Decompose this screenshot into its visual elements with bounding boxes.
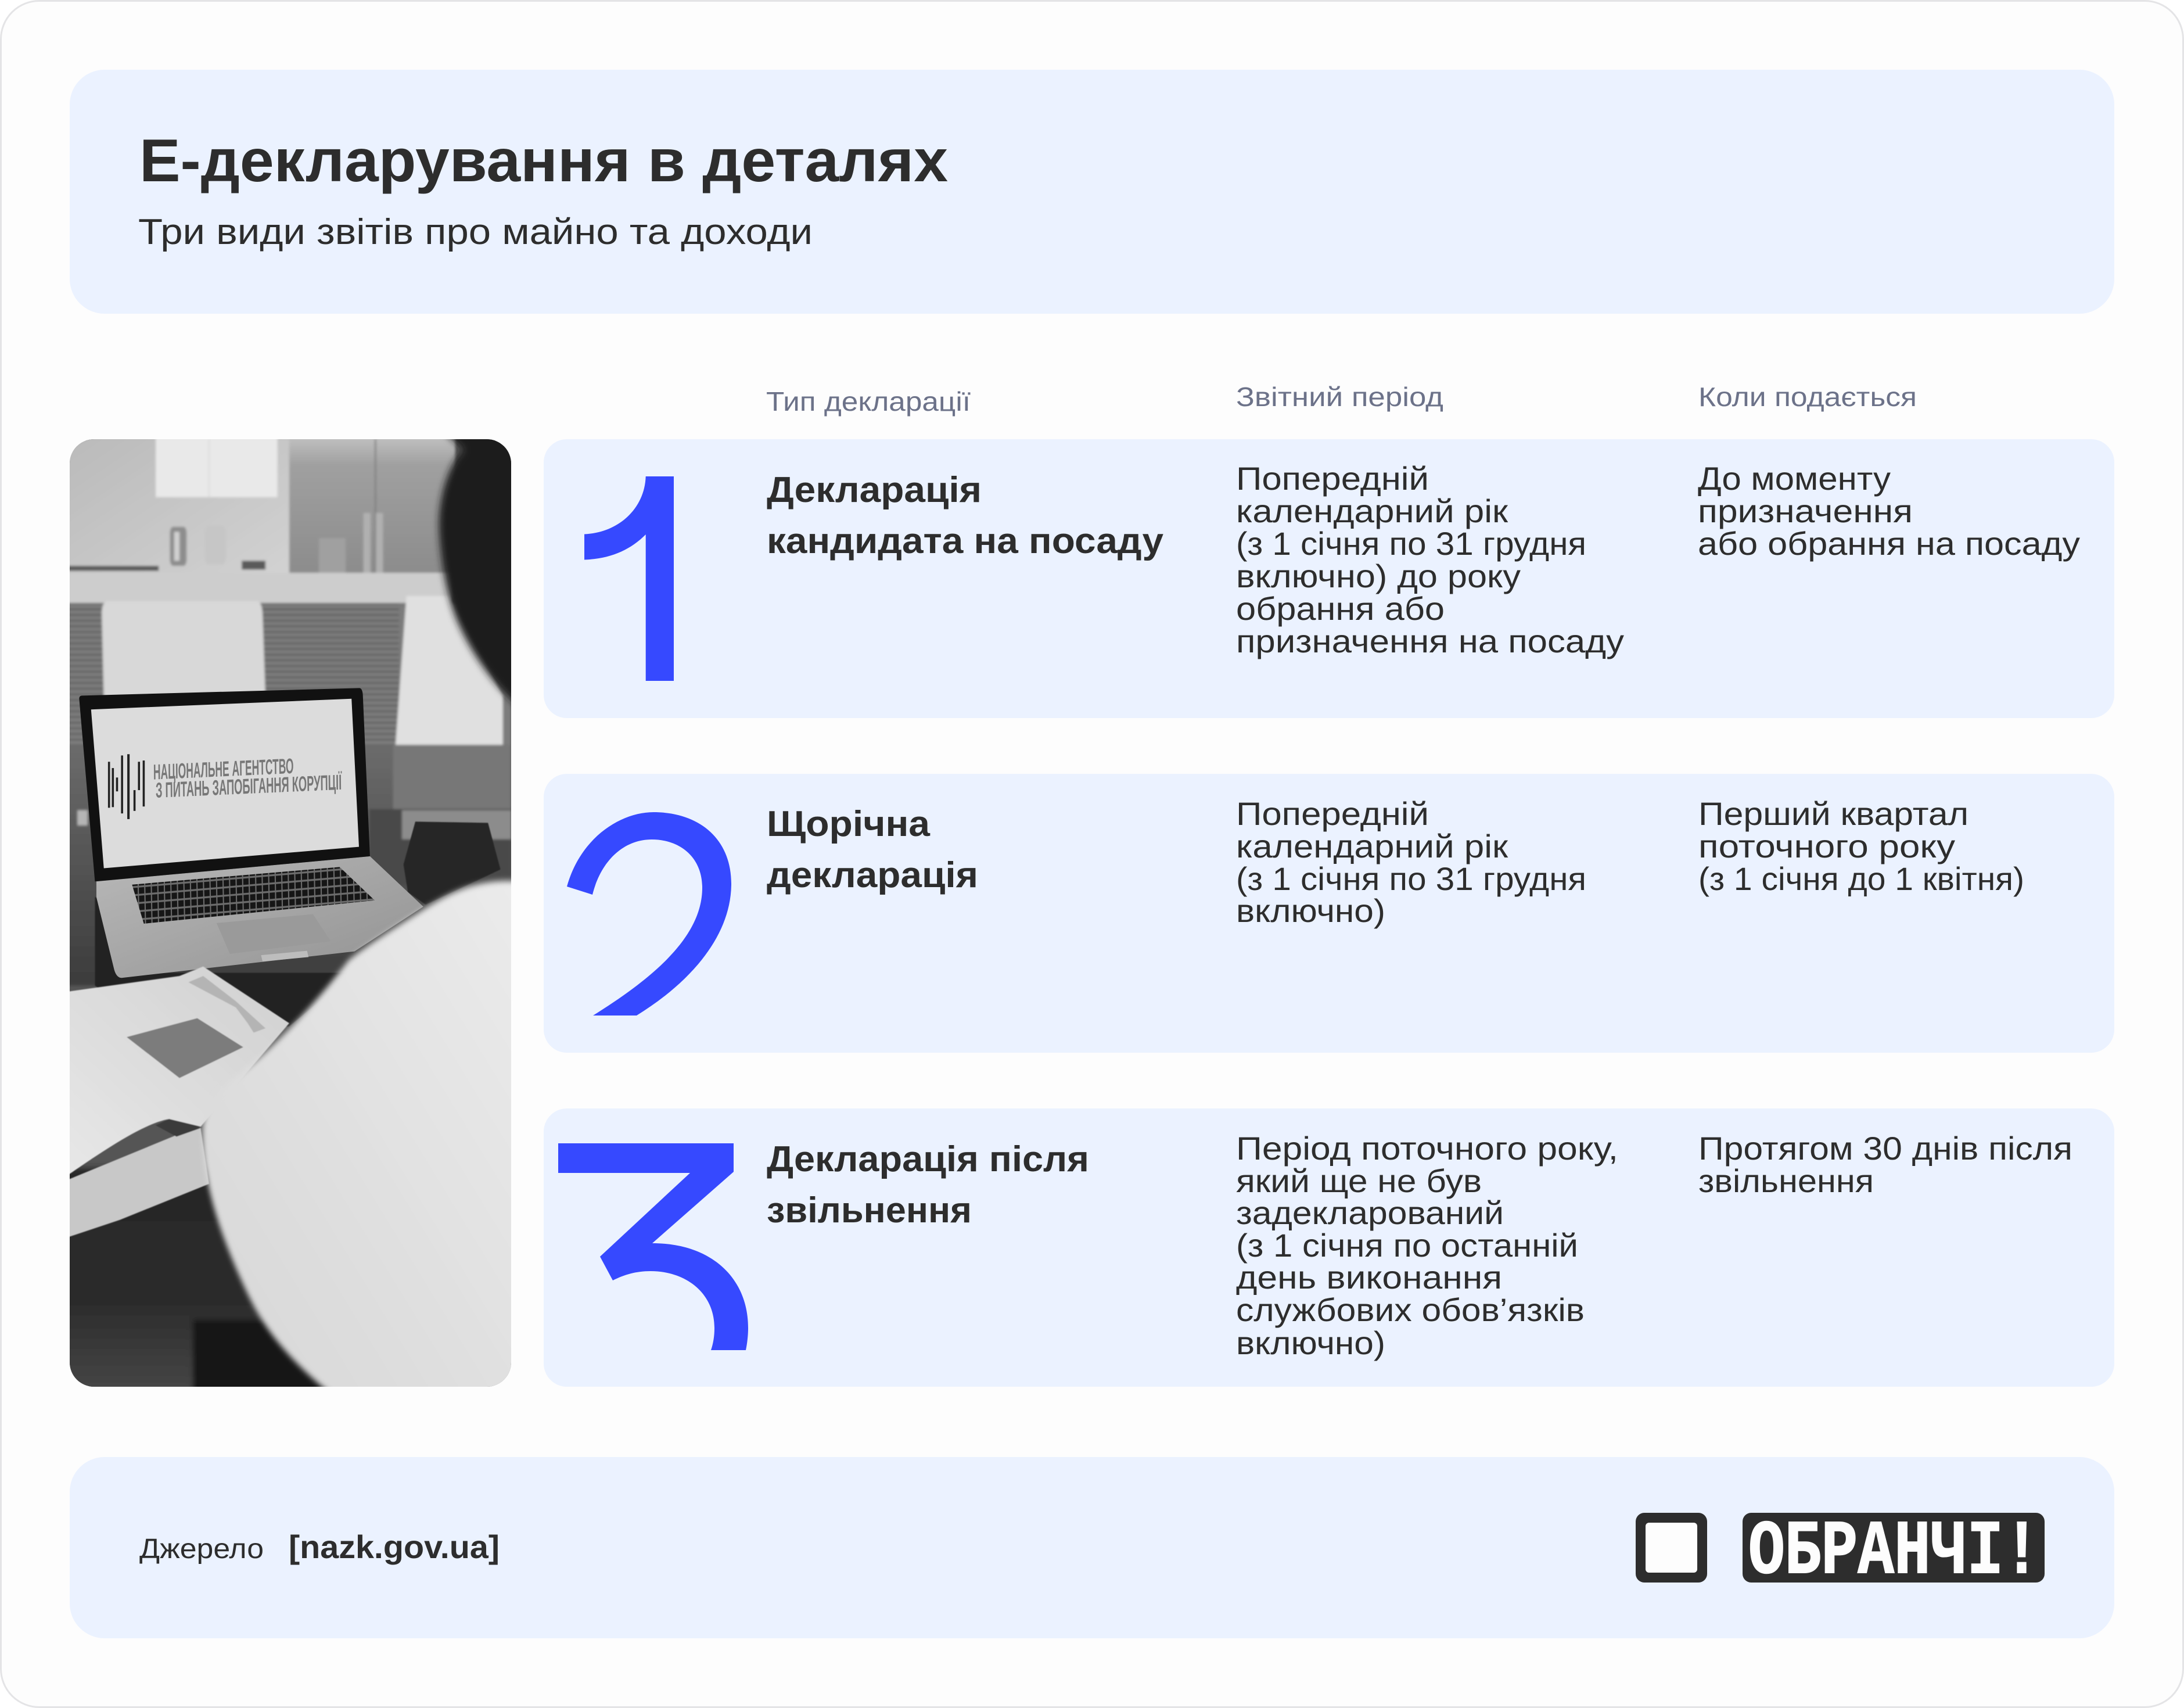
- panel: footer: [70, 1457, 2114, 1638]
- reporting period: день виконання: [1236, 1259, 1502, 1296]
- type: Щорічна: [767, 804, 931, 844]
- source: Джерело: [139, 1534, 264, 1565]
- column headings: Тип декларації: [766, 386, 971, 417]
- table foreground: [70, 1165, 326, 1387]
- number 3: [558, 1143, 748, 1350]
- when filed: поточного року: [1698, 828, 1955, 864]
- laptop: [79, 688, 423, 978]
- type: [767, 470, 1164, 561]
- when filed: звільнення: [1698, 1162, 1874, 1199]
- when filed: призначення: [1698, 493, 1913, 529]
- dark table under laptop: [95, 897, 354, 1027]
- type: кандидата на посаду: [767, 521, 1164, 561]
- person head: [439, 431, 520, 708]
- when filed: Протягом 30 днів після: [1698, 1130, 2072, 1167]
- reporting period: (з 1 січня по 31 грудня: [1236, 525, 1586, 562]
- reporting period: календарний рік: [1236, 828, 1508, 864]
- reporting period: включно): [1236, 1325, 1385, 1361]
- when filed: Перший квартал: [1698, 795, 1969, 832]
- type: декларація: [767, 855, 978, 895]
- reporting period: (з 1 січня по останній: [1236, 1227, 1578, 1264]
- type: [767, 804, 978, 895]
- column headings: Коли подається: [1698, 382, 1917, 412]
- source: [nazk.gov.ua]: [289, 1528, 500, 1565]
- panel: header: [70, 70, 2114, 314]
- bag: [404, 821, 501, 905]
- source: [139, 1528, 500, 1565]
- subtitle: Три види звітів про майно та доходи: [138, 212, 813, 252]
- reporting period: [1236, 795, 1586, 929]
- when filed: [1698, 795, 2024, 897]
- panel: declaration 1: [544, 439, 2114, 718]
- logo: square mark: [1636, 1513, 1707, 1583]
- when filed: [1698, 1130, 2072, 1199]
- panel: declaration 2: [544, 774, 2114, 1053]
- reporting period: Попередній: [1236, 460, 1429, 497]
- when filed: [1698, 460, 2080, 562]
- number 2: [567, 812, 731, 1016]
- reporting period: задекларований: [1236, 1194, 1504, 1231]
- when filed: До моменту: [1698, 460, 1891, 497]
- type: Декларація: [767, 470, 982, 510]
- logo text on screen: НАЦІОНАЛЬНЕ АГЕНТСТВО: [153, 755, 294, 785]
- logo: wordmark: ОБРАНЧІ!: [1748, 1509, 2040, 1596]
- logo text on screen: З ПИТАНЬ ЗАПОБІГАННЯ КОРУПЦІЇ: [156, 770, 342, 803]
- logo text on screen: [153, 759, 342, 798]
- logo bars on screen: [108, 754, 145, 819]
- title: Е-декларування в деталях: [139, 127, 948, 195]
- person shirt: [203, 881, 520, 1401]
- panel: declaration 3: [544, 1108, 2114, 1387]
- type: [767, 1139, 1089, 1230]
- reporting period: календарний рік: [1236, 493, 1508, 529]
- reporting period: Попередній: [1236, 795, 1429, 832]
- type: звільнення: [767, 1190, 972, 1230]
- column headings: [766, 382, 1917, 417]
- reporting period: який ще не був: [1236, 1162, 1482, 1199]
- photo: person at laptop with NACP logo on screen: [58, 418, 520, 1401]
- reporting period: обрання або: [1236, 590, 1445, 627]
- when filed: (з 1 січня до 1 квітня): [1698, 860, 2024, 897]
- reporting period: (з 1 січня по 31 грудня: [1236, 860, 1586, 897]
- when filed: або обрання на посаду: [1698, 525, 2080, 562]
- reporting period: включно) до року: [1236, 558, 1521, 594]
- reporting period: [1236, 1130, 1618, 1361]
- reporting period: Період поточного року,: [1236, 1130, 1618, 1167]
- reporting period: [1236, 460, 1624, 659]
- type: Декларація після: [767, 1139, 1089, 1179]
- number 1: [584, 476, 674, 681]
- reporting period: службових обов’язків: [1236, 1291, 1585, 1328]
- open notebook: [58, 967, 289, 1240]
- column headings: Звітний період: [1236, 382, 1443, 412]
- reporting period: включно): [1236, 892, 1385, 929]
- reporting period: призначення на посаду: [1236, 623, 1624, 659]
